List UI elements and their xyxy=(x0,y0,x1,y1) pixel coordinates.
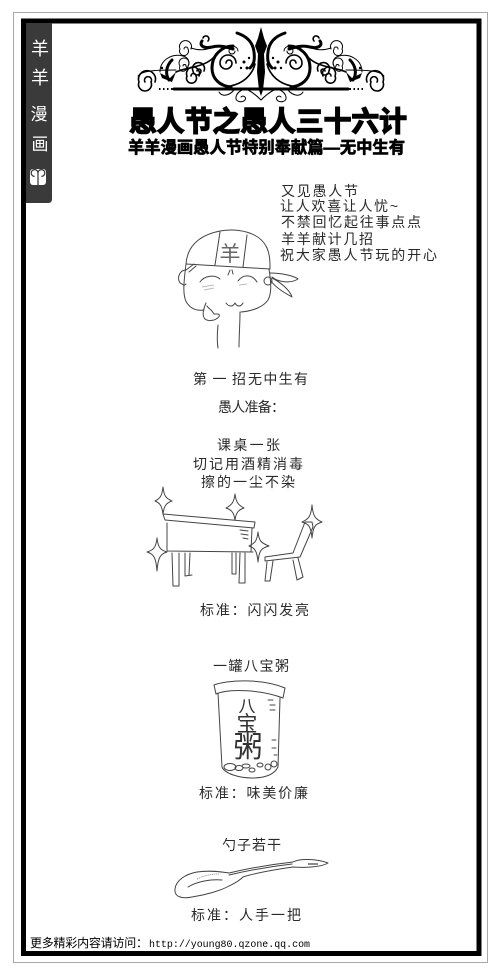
item 3 title: 勺子若干 xyxy=(222,837,281,853)
intro verse: 又见愚人节 xyxy=(281,183,358,199)
illustration: congee jar xyxy=(214,681,285,778)
intro verse: 不禁回忆起往事点点 xyxy=(281,214,421,230)
footer website note: 更多精彩内容请访问： xyxy=(30,935,148,950)
title: 愚人节之愚人三十六计 xyxy=(129,106,407,137)
illustration: congee jar: 宝 xyxy=(236,713,258,736)
item 1 text: 擦的一尘不染 xyxy=(201,474,295,490)
side tab: brand: 羊 xyxy=(31,39,49,59)
side tab: brand: 漫 xyxy=(30,105,48,124)
character: boy with cap: 羊 xyxy=(220,243,240,266)
footer website note xyxy=(30,935,310,951)
item 2 title: 一罐八宝粥 xyxy=(213,658,289,674)
illustration: congee jar: 粥 xyxy=(233,731,263,764)
illustration: congee jar: 八 xyxy=(238,697,256,716)
side tab: brand xyxy=(26,23,52,203)
item 1 text: 课桌一张 xyxy=(217,437,280,453)
item 2 standard: 标准：味美价廉 xyxy=(199,785,308,801)
item 3 standard: 标准：人手一把 xyxy=(191,907,301,923)
illustration: spoon xyxy=(175,859,328,898)
character: boy with cap xyxy=(179,230,298,348)
intro verse: 羊羊献计几招 xyxy=(281,231,373,247)
intro verse xyxy=(280,183,437,263)
item 1 text: 切记用酒精消毒 xyxy=(193,456,303,472)
section heading: 第一招 xyxy=(193,371,246,387)
prepare label: 愚人准备： xyxy=(218,399,285,415)
subtitle: 羊羊漫画愚人节特别奉献篇—无中生有 xyxy=(128,138,405,157)
side tab: brand: 羊 xyxy=(31,68,49,88)
side tab: brand: 画 xyxy=(32,135,48,154)
illustration: desk and chair xyxy=(147,487,322,586)
section heading: 无中生有 xyxy=(248,371,308,387)
item 1 standard: 标准：闪闪发亮 xyxy=(200,602,309,618)
footer website note: http://young80.qzone.qq.com xyxy=(149,939,310,951)
item 1 text xyxy=(193,437,303,490)
intro verse: 祝大家愚人节玩的开心 xyxy=(280,247,437,263)
intro verse: 让人欢喜让人忧~ xyxy=(280,198,398,214)
ornament xyxy=(138,27,384,102)
section heading xyxy=(193,371,308,387)
